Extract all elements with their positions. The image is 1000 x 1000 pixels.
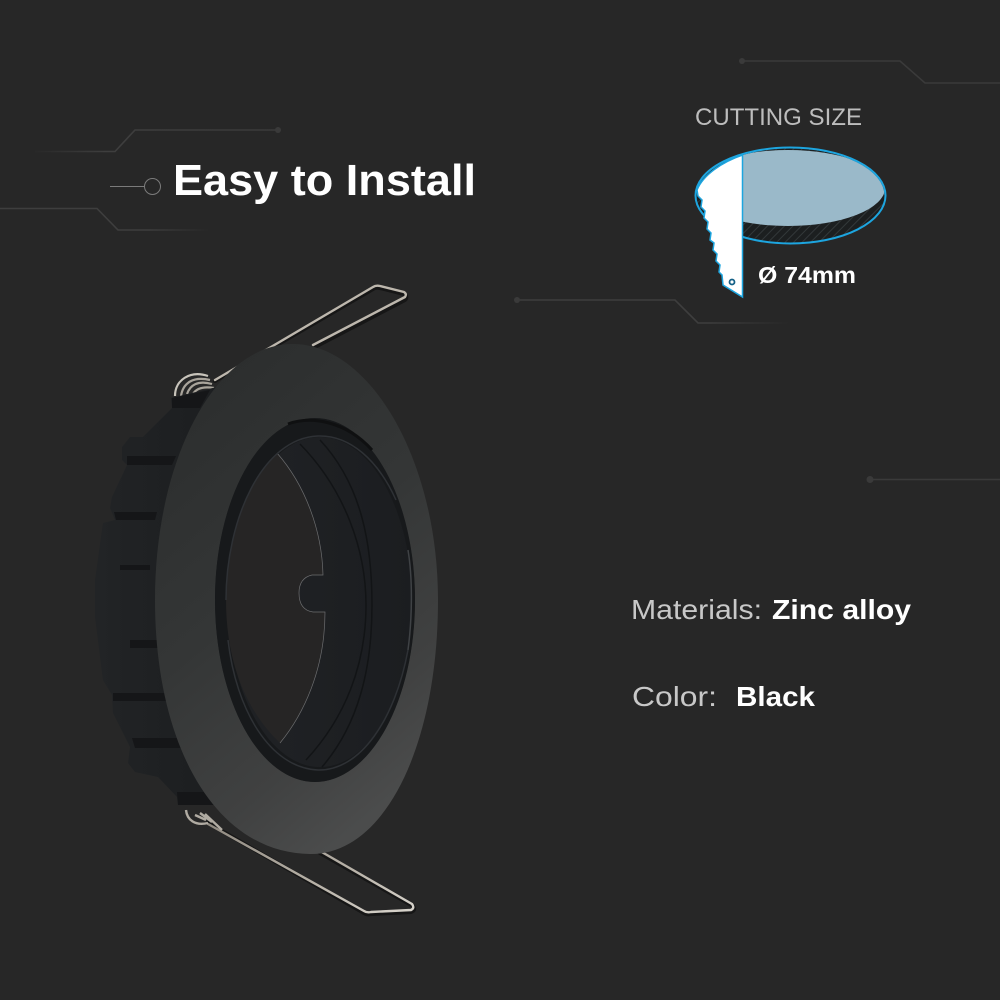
housing lug shadows (113, 390, 215, 805)
spring coil: top (175, 374, 214, 396)
front flange (155, 344, 438, 854)
heading text: Easy to Install (173, 156, 476, 205)
specification: materials (631, 594, 911, 625)
color value: Black (736, 681, 815, 712)
saw blade hole (730, 280, 734, 284)
color label: Color: (632, 681, 717, 712)
tube ridges (300, 440, 372, 767)
heading: Easy to Install (110, 156, 476, 205)
specification: color (632, 681, 815, 712)
spring clip: top (215, 286, 406, 381)
product photo: recessed downlight ring (95, 286, 438, 914)
spring clip: bottom (208, 823, 414, 914)
flange inner recess (215, 418, 415, 782)
spring coil: bottom (186, 810, 222, 830)
cut-out diagram (691, 148, 886, 244)
heading marker icon (110, 178, 160, 194)
opening edge highlight (277, 453, 325, 743)
panel: cutting size (691, 104, 886, 297)
through opening showing background (226, 453, 325, 743)
materials value: Zinc alloy (772, 594, 911, 625)
rim highlights (226, 420, 411, 770)
decorative circuit lines (0, 58, 1000, 483)
diameter value: Ø 74mm (758, 262, 856, 288)
inner tube (228, 437, 412, 767)
cutting size label: CUTTING SIZE (695, 104, 862, 131)
materials label: Materials: (631, 594, 762, 625)
housing body with lugs (95, 385, 270, 805)
icon: saw blade (697, 155, 742, 297)
